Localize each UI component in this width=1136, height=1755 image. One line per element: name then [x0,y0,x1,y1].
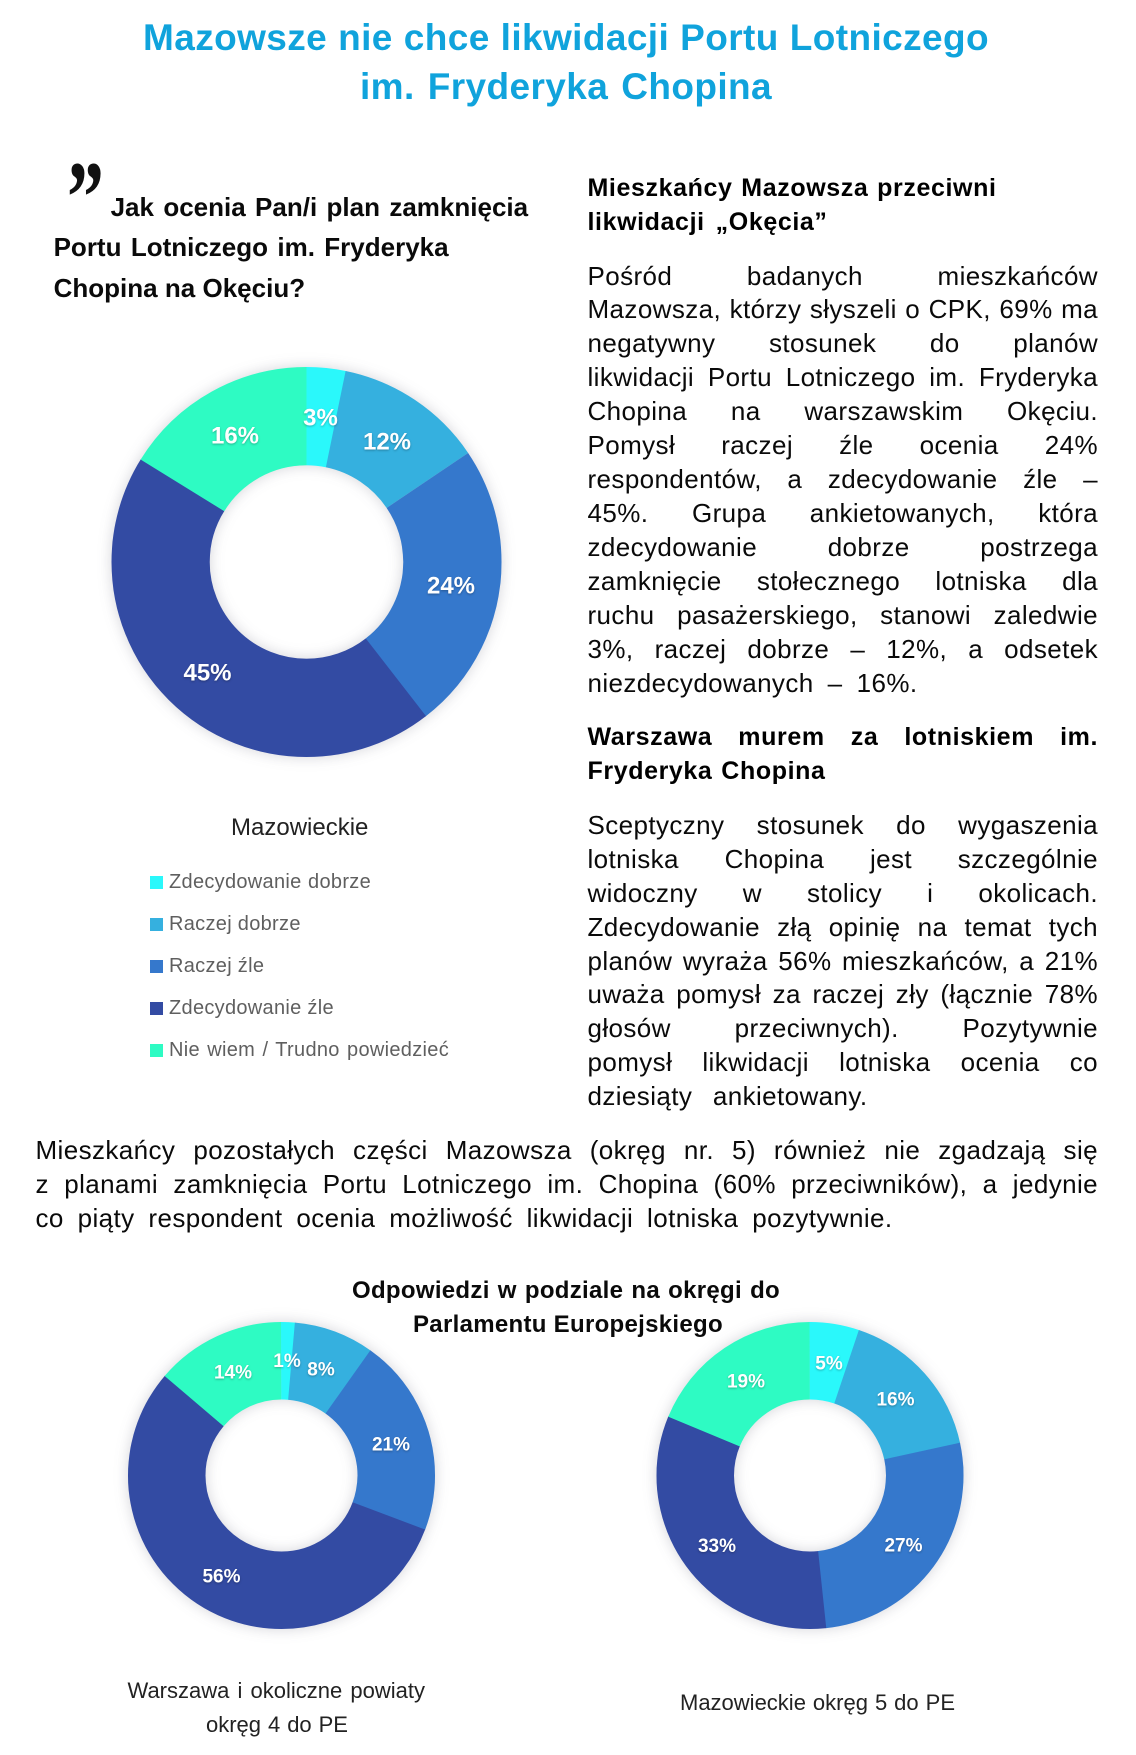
text block: rest of Mazovia [36,1135,1098,1233]
chart section heading [352,1277,780,1338]
text block: Warsaw results: uważa pomysł za raczej zły (łącznie 78% [588,979,1098,1009]
survey question: Portu Lotniczego im. Fryderyka [54,232,449,262]
value labels: Mazowieckie: 3% [303,404,338,432]
chart caption: okręg 4: okręg 4 do PE [206,1712,348,1736]
text block: Warsaw results: Sceptyczny stosunek do wygaszenia [588,810,1098,840]
value labels: okręg 5: 5% [815,1354,843,1374]
text block: rest of Mazovia: z planami zamknięcia Portu Lotniczego im. Chopina (60% przeciwników), a jedynie [36,1169,1098,1199]
text block: Warsaw results: dziesiąty ankietowany. [588,1081,868,1111]
heading: Warszawa murem za lotniskiem [588,723,1098,785]
chart caption: okręg 4: Warszawa i okoliczne powiaty [128,1678,425,1702]
value labels: Mazowieckie: 12% [363,428,411,456]
text block: Mazowsze results: niezdecydowanych – 16%. [588,668,918,698]
text block: Warsaw results [588,810,1098,1111]
value labels: Mazowieckie [183,404,475,686]
text block: Mazowsze results: likwidacji Portu Lotniczego im. Fryderyka [588,362,1098,392]
text block: Warsaw results: widoczny w stolicy i okolicach. [588,878,1098,908]
text block: Mazowsze results: Pomysł raczej źle ocenia 24% [588,430,1098,460]
heading: Warszawa murem za lotniskiem: Warszawa murem za lotniskiem im. [588,723,1098,751]
value labels: okręg 5: 27% [884,1536,923,1556]
chart caption: Mazowieckie: Mazowieckie [231,814,368,840]
text block: Mazowsze results: Chopina na warszawskim Okęciu. [588,396,1098,426]
value labels: Mazowieckie: 24% [427,572,475,600]
title: Mazowsze nie chce likwidacji Portu Lotniczego [143,16,989,58]
text block: Mazowsze results: zamknięcie stołecznego lotniska dla [588,566,1098,596]
donut ring: okręg 5 [695,1361,925,1590]
text block: Warsaw results: pomysł likwidacji lotniska ocenia co [588,1047,1098,1077]
text block: Mazowsze results: negatywny stosunek do planów [588,328,1098,358]
value labels: Mazowieckie: 16% [211,422,259,450]
legend [150,871,449,1061]
survey question: Chopina na Okęciu? [54,273,305,303]
value labels: okręg 4: 21% [372,1434,410,1456]
text block: Warsaw results: głosów przeciwnych). Pozytywnie [588,1013,1098,1043]
value labels: okręg 4: 56% [202,1566,241,1588]
icon: quotation mark: ” [67,140,104,254]
chart caption: okręg 5: Mazowieckie okręg 5 do PE [680,1690,955,1714]
value labels: okręg 5: 16% [876,1390,915,1410]
text block: rest of Mazovia: Mieszkańcy pozostałych części Mazowsza (okręg nr. 5) również nie zgadzają się [36,1135,1098,1165]
legend item: Raczej źle: Raczej źle [169,955,264,977]
chart section heading: Odpowiedzi w podziale na okręgi do [352,1277,780,1304]
text block: Mazowsze results [588,260,1098,698]
heading: Mieszkańcy Mazowsza przeciwni: likwidacji „Okęcia” [588,208,828,236]
text block: Mazowsze results: 3%, raczej dobrze – 12%, a odsetek [588,634,1098,664]
text block: Mazowsze results: Mazowsza, którzy słyszeli o CPK, 69% ma [588,294,1098,324]
value labels: okręg 5: 19% [727,1372,765,1392]
text block: Warsaw results: planów wyraża 56% mieszkańców, a 21% [588,946,1098,976]
text block: Mazowsze results: Pośród badanych mieszkańców [588,260,1098,290]
chart caption: okręg 4 [128,1678,425,1736]
donut ring: Mazowieckie [161,416,452,708]
text block: Mazowsze results: respondentów, a zdecydowanie źle – [588,464,1098,494]
survey question [54,192,528,303]
legend item: Zdecydowanie źle: Zdecydowanie źle [169,997,334,1019]
text block: Mazowsze results: zdecydowanie dobrze postrzega [588,532,1098,562]
value labels: okręg 4 [202,1351,410,1588]
heading: Mieszkańcy Mazowsza przeciwni: Mieszkańcy Mazowsza przeciwni [588,174,996,202]
heading: Mieszkańcy Mazowsza przeciwni [588,174,996,236]
value labels: okręg 5: 33% [698,1536,736,1557]
heading: Warszawa murem za lotniskiem: Fryderyka Chopina [588,757,826,785]
text block: Warsaw results: Zdecydowanie złą opinię na temat tych [588,912,1098,942]
survey question: Jak ocenia Pan/i plan zamknięcia [111,192,528,222]
text block: Warsaw results: lotniska Chopina jest szczególnie [588,844,1098,874]
donut ring: okręg 4 [167,1361,396,1590]
value labels: okręg 5 [698,1354,923,1557]
title: im. Fryderyka Chopina [360,66,772,106]
value labels: Mazowieckie: 45% [183,660,232,686]
legend item: Zdecydowanie dobrze: Zdecydowanie dobrze [169,871,371,893]
text block: rest of Mazovia: co piąty respondent ocenia możliwość likwidacji lotniska pozytywnie. [36,1203,892,1233]
value labels: okręg 4: 8% [307,1360,335,1380]
legend item: Nie wiem / Trudno powiedzieć: Nie wiem / Trudno powiedzieć [169,1039,449,1061]
value labels: okręg 4: 1% [273,1351,301,1372]
value labels: okręg 4: 14% [214,1362,252,1384]
text block: Mazowsze results: ruchu pasażerskiego, stanowi zaledwie [588,600,1098,630]
chart section heading: Parlamentu Europejskiego [413,1311,723,1338]
legend item: Raczej dobrze: Raczej dobrze [169,912,301,934]
title [143,16,989,106]
text block: Mazowsze results: 45%. Grupa ankietowanych, która [588,498,1098,528]
